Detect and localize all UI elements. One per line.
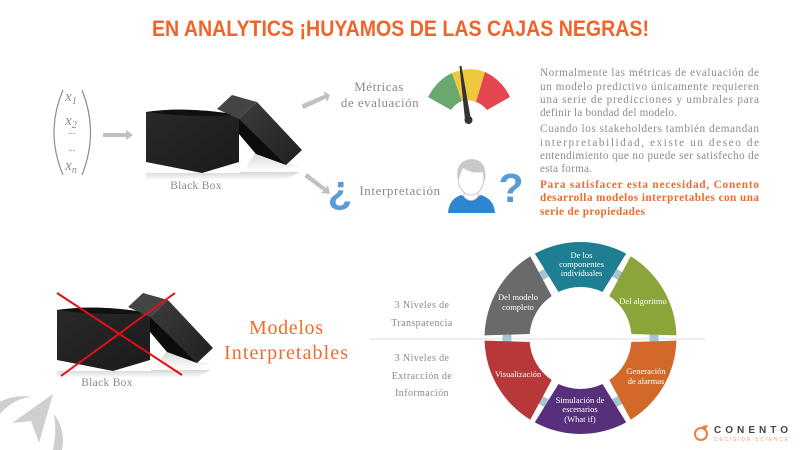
heading: Modelos Interpretables (224, 317, 348, 364)
segment: Generación de alarmas (597, 321, 686, 426)
icon: gauge (428, 66, 510, 124)
segment: Del modelo completo: Del modelo (498, 292, 538, 302)
label: 3 niveles de extracción: Información (395, 388, 449, 399)
segment: De los componentes individuales: componentes (559, 259, 604, 269)
logo: Conento: DECISION SCIENCE (714, 437, 789, 443)
segment: Del algoritmo: Del algoritmo (619, 296, 667, 306)
label: Métricas de evaluación: Métricas (354, 79, 404, 94)
label: 3 niveles de extracción: Extracción de (392, 371, 452, 382)
segment: Generación de alarmas: de alarmas (628, 376, 664, 386)
label: 3 niveles de extracción: 3 Niveles de (395, 353, 450, 364)
text block: explanation: Normalmente las métricas de evaluación de (540, 67, 759, 79)
segment: Del modelo completo: completo (502, 302, 534, 312)
segment: Del algoritmo (597, 250, 686, 355)
text block: explanation (540, 67, 759, 218)
input variables vector: x (65, 158, 72, 174)
arrow: to metrics (302, 91, 330, 109)
label: 3 niveles de extracción (392, 353, 452, 399)
segment: Simulación de escenarios: (What if) (564, 414, 596, 424)
input variables vector (54, 89, 90, 176)
icon: question mark: ? (498, 165, 524, 211)
label: 3 niveles de transparencia: Transparencia (391, 318, 453, 329)
arrow: to interpretation (304, 173, 330, 194)
segment: Visualización (475, 321, 564, 426)
icon: open black box (146, 95, 302, 180)
input variables vector: 1 (72, 96, 77, 107)
input variables vector: 2 (72, 120, 77, 131)
text block: explanation: serie de propiedades (540, 206, 646, 218)
segment: De los componentes individuales (535, 242, 626, 292)
watermark: compass logo (0, 394, 63, 450)
text block: explanation: Cuando los stakeholders también demandan (540, 123, 759, 135)
segment: Del modelo completo (475, 250, 564, 355)
heading: Modelos Interpretables: Interpretables (224, 342, 348, 364)
text block: explanation: entendimiento que no puede ser satisfecho de (540, 150, 759, 162)
icon: crossed-out black box (57, 293, 213, 378)
text block: explanation: interpretabilidad, existe un deseo de (540, 137, 759, 149)
label: Métricas de evaluación: de evaluación (341, 95, 419, 110)
ring diagram: six properties (475, 242, 686, 434)
segment: Generación de alarmas: Generación (626, 366, 666, 376)
title: EN ANALYTICS ¡HUYAMOS DE LAS CAJAS NEGRAS! (152, 16, 649, 41)
heading: Modelos Interpretables: Modelos (249, 317, 323, 339)
text block: explanation: definir la bondad del modelo. (540, 107, 677, 119)
icon: confused person (448, 159, 495, 213)
text block: explanation: desarrolla modelos interpretables con una (540, 192, 759, 204)
label: Black Box crossed: Black Box (81, 377, 133, 389)
text block: explanation: un modelo predictivo únicamente requieren (540, 81, 759, 93)
logo: Conento: CONENTO (714, 425, 788, 436)
label: Interpretación: Interpretación (359, 183, 441, 198)
divider line (370, 338, 705, 340)
label: Métricas de evaluación (341, 79, 419, 110)
segment: Visualización: Visualización (495, 369, 542, 379)
icon: inverted question mark: ¿ (328, 168, 352, 212)
segment: Simulación de escenarios: Simulación de (556, 395, 605, 405)
input variables vector: ... (68, 143, 76, 154)
label: 3 niveles de transparencia: 3 Niveles de (395, 300, 450, 311)
text block: explanation: Para satisfacer esta necesidad, Conento (540, 179, 759, 191)
segment: De los componentes individuales: De los (571, 250, 592, 260)
logo: Conento (695, 425, 789, 443)
segment: De los componentes individuales: individuales (561, 268, 602, 278)
input variables vector: ... (68, 126, 76, 137)
label: 3 niveles de transparencia (391, 300, 453, 329)
text block: explanation: esta forma. (540, 163, 592, 175)
arrow: inputs to black box (103, 130, 133, 140)
input variables vector: x (65, 113, 72, 129)
segment: Simulación de escenarios (535, 384, 626, 434)
red cross (57, 293, 182, 376)
segment: Simulación de escenarios: escenarios (562, 404, 598, 414)
label: Black Box: Black Box (170, 180, 222, 192)
input variables vector: n (72, 165, 77, 176)
text block: explanation: una serie de predicciones y umbrales para (540, 94, 759, 106)
input variables vector: x (65, 89, 72, 105)
